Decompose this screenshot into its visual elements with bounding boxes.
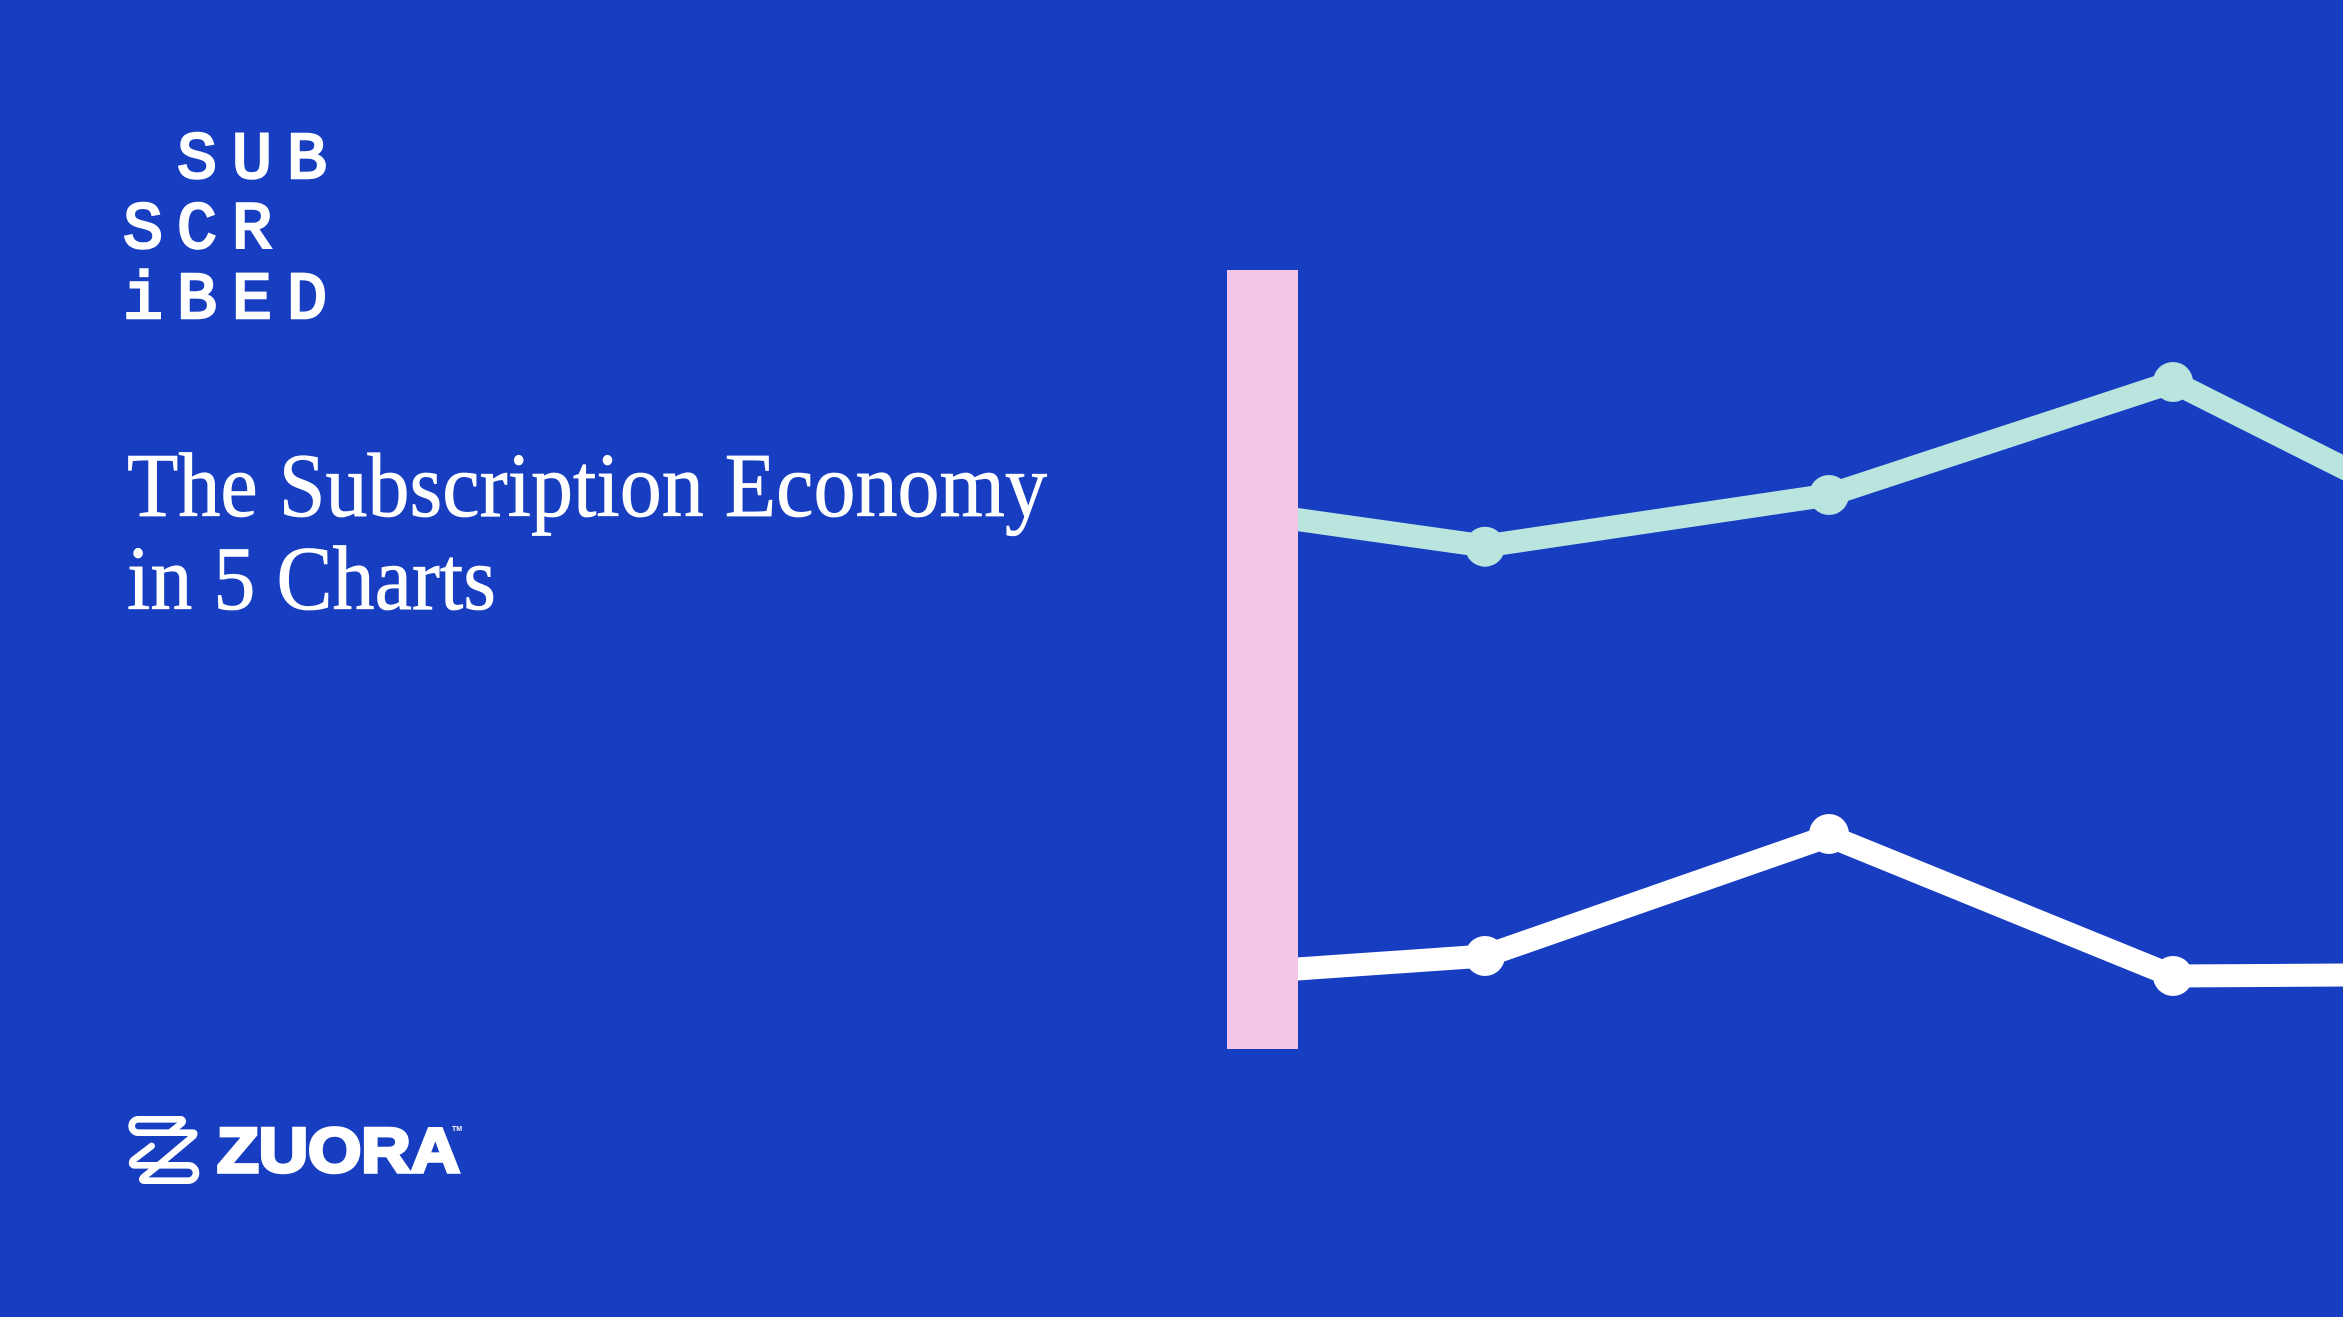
wordmark: SUBSCRIBED: D (287, 263, 327, 339)
wordmark: SUBSCRIBED: S (123, 193, 163, 269)
logo wordmark: ZUORA (217, 1116, 460, 1186)
wordmark: SUBSCRIBED: B (177, 263, 217, 339)
title: in 5 Charts (127, 528, 496, 629)
wordmark: SUBSCRIBED: S (177, 123, 217, 199)
icon: Zuora Z mark (132, 1119, 196, 1181)
title: The Subscription Economy (127, 435, 1047, 536)
title (127, 435, 1047, 629)
chart: teal line series (1290, 362, 2343, 567)
wordmark: SUBSCRIBED: U (232, 123, 272, 199)
chart: white line series (1290, 814, 2343, 996)
wordmark: SUBSCRIBED: B (287, 123, 327, 199)
wordmark: SUBSCRIBED: R (232, 193, 272, 269)
wordmark: SUBSCRIBED (123, 123, 327, 339)
chart: pink vertical bar (1227, 270, 1298, 1049)
wordmark: SUBSCRIBED: E (232, 263, 272, 339)
wordmark: SUBSCRIBED: i (123, 263, 163, 339)
logo: Zuora (132, 1116, 462, 1186)
wordmark: SUBSCRIBED: C (177, 193, 217, 269)
trademark: TM (452, 1126, 462, 1133)
